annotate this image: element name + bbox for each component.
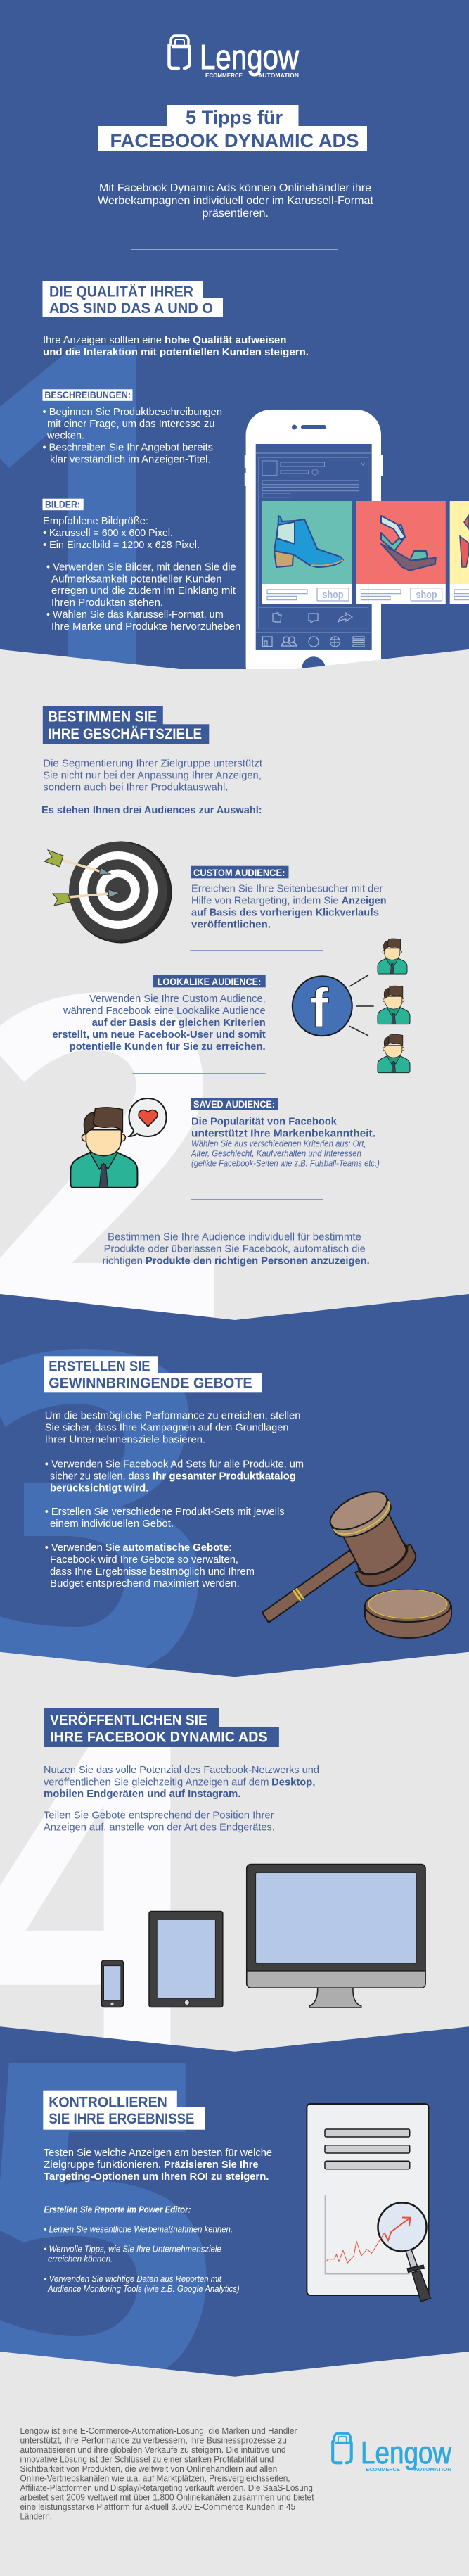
line chart — [326, 2218, 411, 2263]
tip 3 bullet 2: einem individuellen Gebot. — [50, 1518, 174, 1530]
tip 4 paragraph 2 — [44, 1810, 275, 1834]
heading: tip 2: IHRE GESCHÄFTSZIELE — [48, 726, 202, 742]
tip 3 bullet 2 — [45, 1506, 285, 1530]
icon: boot — [274, 516, 343, 567]
tip 3 bullet 3: dass Ihre Ergebnisse bestmöglich und Ihrem — [50, 1566, 255, 1578]
lookalike audience block: potentielle Kunden für Sie zu erreichen. — [70, 1041, 266, 1053]
custom audience block: Anzeigen — [342, 895, 387, 906]
company description: Ländern. — [20, 2511, 52, 2522]
tip 3 intro: Sie sicher, dass Ihre Kampagnen auf den Grundlagen — [45, 1422, 289, 1433]
saved audience block: Alter, Geschlecht, Kaufverhalten und Interessen — [191, 1149, 361, 1159]
company description: Affiliate-Plattformen und Display/Retargeting verkauft werden. Die SaaS-Lösung — [20, 2482, 313, 2493]
panel: tip 2 text — [41, 706, 410, 1267]
icon: person middle — [378, 986, 410, 1024]
Bilder text: erregen und die zudem im Einklang mit — [51, 585, 236, 597]
tip 5 intro: Präzisieren Sie Ihre — [164, 2159, 259, 2171]
carousel card 2 — [356, 501, 446, 604]
icon: tablet — [149, 1911, 223, 2007]
Bilder text: Ihre Marke und Produkte hervorzuheben — [51, 621, 240, 633]
custom audience block — [191, 866, 387, 930]
tip 2 closing text: Produkte den richtigen Personen anzuzeigen. — [146, 1256, 370, 1267]
tip 3 bullet 3: Budget entsprechend maximiert werden. — [50, 1578, 240, 1590]
custom audience block: CUSTOM AUDIENCE: — [193, 867, 285, 878]
custom audience block: auf Basis des vorherigen Klickverlaufs — [191, 907, 379, 918]
big number 5 — [0, 2063, 207, 2369]
heading: tip 4 — [44, 1708, 279, 1747]
custom audience block: veröffentlichen. — [191, 919, 271, 930]
heading: tip 3: ERSTELLEN SIE — [49, 1359, 150, 1375]
illustration: phone with carousel — [245, 410, 469, 691]
icon: facebook circle: f — [310, 977, 329, 1039]
tip 4 paragraph 2: Anzeigen auf, anstelle von der Art des Endgerätes. — [44, 1822, 275, 1834]
Bilder text: Empfohlene Bildgröße: — [43, 516, 148, 527]
company description: innovative Lösung ist der Schlüssel zu einer starken Profitabilität und — [20, 2454, 274, 2464]
Bilder text: • Wählen Sie das Karussell-Format, um — [46, 609, 224, 621]
lookalike audience block: während Facebook eine Lookalike Audience — [63, 1005, 266, 1017]
tip 5 intro: Targeting-Optionen um Ihren ROI zu steigern. — [44, 2171, 269, 2183]
icons: phone toolbar — [263, 637, 364, 647]
heading: tip 4: VERÖFFENTLICHEN SIE — [50, 1713, 207, 1729]
company description: Online-Vertriebskanälen wie u.a. auf Marktplätzen, Preisvergleichsseiten, — [20, 2473, 290, 2484]
tip 5 intro: Zielgruppe funktionieren. — [44, 2159, 161, 2171]
tip 3 intro — [45, 1410, 301, 1445]
Beschreibungen bullets — [42, 407, 222, 466]
carousel card 1 — [262, 501, 352, 604]
company description: unterstützt, ihre Performance zu verbessern, ihre Businessprozesse zu — [20, 2435, 287, 2446]
tip 2 closing text: Produkte oder überlassen Sie Facebook, automatisch die — [104, 1244, 366, 1255]
tip 1 intro — [43, 335, 309, 358]
facebook post wireframe — [256, 453, 372, 628]
panel: footer — [20, 2425, 452, 2522]
footer logo: Lengow — [361, 2435, 452, 2470]
heading: tip 3: GEWINNBRINGENDE GEBOTE — [49, 1375, 252, 1391]
icon: arrow lower — [53, 889, 120, 906]
intro text — [98, 182, 374, 220]
tip 3 bullet 3: : — [229, 1542, 231, 1554]
icon: person bottom — [378, 1034, 410, 1073]
company description: Lengow ist eine E-Commerce-Automation-Lösung, die Marken und Händler — [20, 2425, 297, 2436]
tip 3 bullet 3: Facebook wird Ihre Gebote so verwalten, — [50, 1554, 238, 1566]
heading: tip 4: IHRE FACEBOOK DYNAMIC ADS — [50, 1730, 268, 1746]
saved audience block: Wählen Sie aus verschiedenen Kriterien aus: Ort, — [191, 1139, 366, 1149]
tip 3 bullet 2: • Erstellen Sie verschiedene Produkt-Sets mit jeweils — [45, 1506, 285, 1518]
saved audience block: (gelikte Facebook-Seiten wie z.B. Fußball-Teams etc.) — [191, 1159, 380, 1169]
Bilder text: • Karussell = 600 x 600 Pixel. — [43, 528, 173, 539]
illustration: target with arrows — [44, 842, 172, 943]
carousel card 1: shop — [322, 589, 343, 601]
panel: tip 2 background — [0, 649, 469, 1309]
carousel card 2: shop — [416, 589, 437, 601]
heading: tip 1 — [42, 281, 223, 317]
panel: tip 4 text — [44, 1708, 319, 1834]
title: 5 Tipps für — [186, 107, 283, 128]
tip 4 paragraph 1: Nutzen Sie das volle Potenzial des Facebook-Netzwerks und — [44, 1765, 319, 1776]
title — [98, 105, 367, 151]
company description — [20, 2425, 314, 2522]
audiences lead-in: Es stehen Ihnen drei Audiences zur Auswahl: — [41, 805, 262, 816]
gavel block — [365, 1590, 451, 1638]
gavel head — [325, 1484, 421, 1594]
magnifier lens — [378, 2202, 426, 2252]
lookalike audience block: auf der Basis der gleichen Kriterien — [92, 1017, 266, 1029]
icon: speech bubble heart — [129, 1098, 166, 1136]
label: Beschreibungen: BESCHREIBUNGEN: — [44, 389, 131, 400]
tip 3 bullet 1: • Verwenden Sie Facebook Ad Sets für alle Produkte, um — [45, 1459, 304, 1470]
tip 2 intro: sondern auch bei Ihrer Produktauswahl. — [43, 782, 229, 793]
Beschreibungen bullets: • Beschreiben Sie Ihr Angebot bereits — [42, 443, 213, 454]
icon: desktop monitor — [247, 1865, 425, 2007]
illustration: gavel — [262, 1484, 451, 1638]
heading: tip 3 — [44, 1356, 262, 1392]
carousel card 3 — [450, 501, 469, 604]
tip 4 paragraph 1: veröffentlichen Sie gleichzeitig Anzeigen auf dem — [44, 1777, 269, 1788]
panel: intro and tip 1 background — [0, 0, 469, 669]
illustration: facebook network — [293, 939, 410, 1073]
logo — [169, 36, 299, 79]
lookalike audience block: LOOKALIKE AUDIENCE: — [158, 976, 261, 987]
icon: arrow upper — [44, 850, 110, 875]
tip 1 intro: und die Interaktion mit potentiellen Kunden steigern. — [43, 347, 309, 358]
tip 5 intro — [44, 2147, 272, 2183]
big number 1 — [0, 345, 136, 664]
saved audience block: SAVED AUDIENCE: — [193, 1098, 275, 1110]
icon: sandal — [381, 516, 436, 571]
illustration: devices — [101, 1865, 425, 2007]
heading: tip 5: KONTROLLIEREN — [49, 2094, 167, 2110]
panel: tip 3 background — [0, 1294, 469, 1677]
heading: tip 1: DIE QUALITÄT IHRER — [49, 284, 193, 300]
tip 3 intro: Ihrer Unternehmensziele basieren. — [45, 1434, 205, 1445]
illustration: report with magnifier — [307, 2104, 430, 2302]
panel: tip 5 background — [0, 2026, 469, 2377]
tip 3 bullet 3: • Verwenden Sie — [45, 1542, 120, 1554]
icon: smartphone — [101, 1960, 124, 2007]
tip 2 closing text: Bestimmen Sie Ihre Audience individuell für bestimmte — [108, 1232, 361, 1243]
tip 5 report list: Erstellen Sie Reporte im Power Editor: — [44, 2204, 191, 2214]
custom audience block: Erreichen Sie Ihre Seitenbesucher mit der — [191, 883, 383, 894]
Bilder text: Ihren Produkten stehen. — [51, 597, 163, 609]
report sheet — [307, 2104, 429, 2295]
tip 4 paragraph 1: mobilen Endgeräten und auf Instagram. — [44, 1789, 240, 1800]
lookalike audience block: erstellt, um neue Facebook-User und somit — [52, 1029, 266, 1041]
logo: ECOMMERCE — [205, 72, 243, 79]
tip 2 intro: Sie nicht nur bei der Anpassung Ihrer Anzeigen, — [43, 770, 262, 781]
tip 4 paragraph 1 — [44, 1765, 319, 1800]
Beschreibungen bullets: klar verständlich im Anzeigen-Titel. — [50, 455, 211, 466]
tip 3 intro: Um die bestmögliche Performance zu erreichen, stellen — [45, 1410, 301, 1421]
phone body — [245, 410, 383, 691]
tip 2 intro — [43, 758, 262, 793]
lookalike audience block: Verwenden Sie Ihre Custom Audience, — [89, 994, 266, 1005]
Bilder text: Aufmerksamkeit potentieller Kunden — [51, 573, 222, 585]
tip 5 report list: • Lernen Sie wesentliche Werbemaßnahmen kennen. — [44, 2224, 233, 2234]
big number 4 — [0, 1738, 170, 2045]
intro text: Werbekampagnen individuell oder im Karussell-Format — [98, 195, 374, 207]
logo: Lengow — [200, 39, 299, 77]
company description: eine leistungsstarke Plattform für aktuell 3.500 E-Commerce Kunden in 45 — [20, 2501, 295, 2512]
intro text: Mit Facebook Dynamic Ads können Onlinehändler ihre — [99, 182, 371, 194]
tip 3 bullet 3: automatische Gebote — [122, 1542, 229, 1554]
company description: automatisieren und ihre globalen Verkäufe zu steigern. Die intuitive und — [20, 2444, 286, 2455]
tip 3 bullet 1: berücksichtigt wird. — [50, 1483, 148, 1494]
tip 3 bullet 3 — [45, 1542, 255, 1590]
custom audience block: Hilfe von Retargeting, indem Sie — [191, 895, 339, 906]
tip 5 report list: • Wertvolle Tipps, wie Sie Ihre Unternehmensziele — [44, 2245, 221, 2254]
tip 3 bullet 1 — [45, 1459, 304, 1494]
Bilder text: • Ein Einzelbild = 1200 x 628 Pixel. — [43, 540, 200, 551]
heading: tip 5 — [43, 2091, 205, 2130]
Beschreibungen bullets: wecken. — [46, 431, 84, 442]
tip 1 intro: hohe Qualität aufweisen — [165, 335, 287, 346]
footer logo — [333, 2433, 452, 2473]
logo: AUTOMATION — [258, 72, 299, 79]
tip 2 closing text: richtigen — [103, 1256, 143, 1267]
tip 2 intro: Die Segmentierung Ihrer Zielgruppe unterstützt — [43, 758, 262, 769]
saved audience block: Die Popularität von Facebook — [191, 1117, 338, 1128]
footer logo: AUTOMATION — [414, 2466, 451, 2473]
tip 5 report list: Audience Monitoring Tools (wie z.B. Google Analytics) — [47, 2284, 240, 2294]
Beschreibungen bullets: • Beginnen Sie Produktbeschreibungen — [42, 407, 222, 418]
big number 2 — [0, 992, 214, 1318]
tip 5 report list — [44, 2204, 240, 2294]
heading: tip 1: ADS SIND DAS A UND O — [49, 300, 213, 317]
tip 4 paragraph 1: Desktop, — [271, 1777, 315, 1788]
icons: like comment share — [273, 613, 352, 623]
tip 3 bullet 1: sicher zu stellen, dass — [50, 1471, 150, 1482]
gavel handle — [262, 1550, 356, 1623]
heading: tip 5: SIE IHRE ERGEBNISSE — [49, 2111, 194, 2127]
tip 3 bullet 1: Ihr gesamter Produktkatalog — [153, 1471, 296, 1482]
Bilder text: • Verwenden Sie Bilder, mit denen Sie die — [46, 561, 236, 573]
icon: person top — [378, 939, 407, 974]
panel: tip 1 text — [42, 281, 309, 633]
panel: tip 5 text — [43, 2091, 272, 2294]
heading: tip 2 — [43, 706, 209, 744]
tip 5 intro: Testen Sie welche Anzeigen am besten für welche — [44, 2147, 272, 2159]
title: FACEBOOK DYNAMIC ADS — [110, 130, 359, 151]
saved audience block — [191, 1098, 380, 1169]
tip 2 closing text — [103, 1232, 370, 1267]
lookalike audience block — [52, 975, 266, 1053]
magnifier handle — [406, 2250, 430, 2302]
saved audience block: unterstützt Ihre Markenbekanntheit. — [191, 1129, 375, 1140]
tip 1 intro: Ihre Anzeigen sollten eine — [43, 335, 162, 346]
big number 3 — [0, 1349, 199, 1668]
Bilder text — [43, 516, 240, 633]
tip 5 report list: • Verwenden Sie wichtige Daten aus Reporten mit — [44, 2274, 221, 2284]
tip 4 paragraph 2: Teilen Sie Gebote entsprechend der Position Ihrer — [44, 1810, 274, 1821]
tip 5 report list: erreichen können. — [48, 2254, 113, 2264]
icon: facebook circle — [293, 976, 352, 1039]
intro text: präsentieren. — [203, 208, 269, 220]
company description: arbeitet seit 2009 weltweit mit über 1.800 Onlinekanälen zusammen und bietet — [20, 2492, 314, 2502]
heading: tip 2: BESTIMMEN SIE — [48, 709, 157, 725]
label: Bilder: BILDER: — [45, 499, 80, 510]
panel: tip 3 text — [44, 1356, 304, 1590]
footer logo: ECOMMERCE — [366, 2466, 400, 2473]
company description: Sichtbarkeit von Produkten, die weltweit von Onlinehändlern auf allen — [20, 2463, 277, 2474]
Beschreibungen bullets: mit einer Frage, um das Interesse zu — [47, 419, 214, 430]
illustration: person with heart bubble — [70, 1098, 167, 1188]
